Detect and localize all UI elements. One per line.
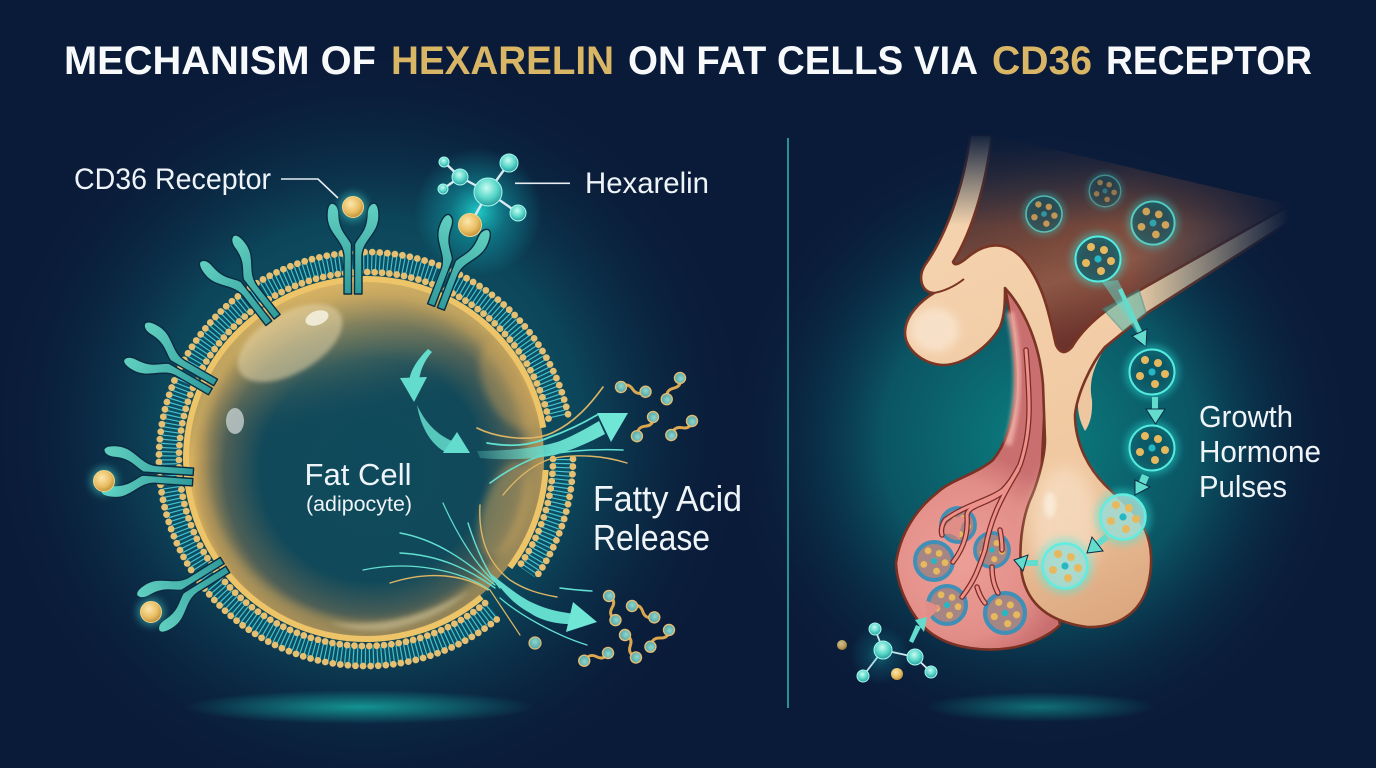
title — [64, 39, 1312, 83]
receptor: top with ligand — [327, 193, 379, 294]
lower molecule — [837, 623, 937, 685]
arrow: pulse 4 to anterior lobe — [1014, 555, 1038, 571]
stalk side strip — [1078, 347, 1105, 431]
portal vessels — [941, 350, 1029, 603]
title: MECHANISM OF — [64, 39, 376, 83]
arrow: lower fatty acid release — [490, 573, 597, 632]
label: Growth Hormone Pulses — [1199, 399, 1321, 504]
hexarelin glow — [414, 148, 542, 276]
arrow: molecule to anterior lobe — [909, 617, 927, 643]
title: RECEPTOR — [1106, 39, 1312, 83]
receptor: left with ligand — [90, 445, 195, 503]
title: HEXARELIN — [391, 39, 614, 83]
receptor: upper left — [196, 232, 293, 336]
panel: pituitary anatomy — [837, 135, 1300, 685]
anterior lobe — [896, 288, 1060, 650]
arrow: pulse 3 to 4 — [1087, 534, 1109, 553]
label: CD36 Receptor: CD36 Receptor — [74, 163, 271, 196]
receptor: left upper — [121, 319, 226, 410]
receptor: hexarelin bound — [412, 213, 493, 316]
title: CD36 — [992, 39, 1092, 83]
gold cell wall — [186, 279, 546, 639]
arrow: vesicle exits hypothalamus — [1102, 280, 1147, 347]
cell body — [188, 281, 553, 637]
title: ON FAT CELLS VIA — [628, 39, 978, 83]
label: Growth Hormone Pulses: Hormone — [1199, 434, 1321, 469]
label: Fat Cell: (adipocyte) — [306, 493, 412, 516]
anterior stalk highlight — [1008, 312, 1017, 445]
fatty acids: lower group — [529, 589, 677, 668]
streaks: lower release — [363, 503, 592, 645]
label: Growth Hormone Pulses: Growth — [1199, 399, 1293, 434]
receptor: lower left with ligand — [134, 543, 239, 635]
membrane bilayer — [159, 252, 573, 666]
label: Growth Hormone Pulses: Pulses — [1199, 469, 1287, 504]
bulb highlight — [911, 308, 959, 352]
portal band — [1103, 290, 1146, 331]
arrow: pulse 2 to 3 — [1135, 474, 1150, 495]
floor glow right — [925, 692, 1155, 722]
label: Fatty Acid Release: Release — [593, 517, 710, 558]
vesicles in anterior lobe — [915, 508, 1025, 633]
label: Fatty Acid Release: Fatty Acid — [593, 478, 742, 519]
hypothalamus tissue — [953, 135, 1290, 352]
vesicle pulses — [1041, 349, 1175, 590]
posterior lobe highlight — [1031, 467, 1099, 583]
label: Fat Cell: Fat Cell — [304, 457, 412, 492]
arrow: signal to release — [417, 405, 470, 453]
bulb crease — [934, 279, 964, 293]
tan tissue: bulb, stalk, posterior lobe, band — [905, 135, 1300, 627]
arrow: pulse 1 to 2 — [1146, 397, 1165, 424]
floor glow left — [185, 690, 535, 724]
panel: fat cell — [90, 148, 700, 668]
arrow: upper fatty acid release — [477, 413, 628, 459]
arrow: signal downward — [400, 349, 432, 402]
label: Hexarelin: Hexarelin — [585, 167, 709, 200]
streaks: upper release — [477, 387, 627, 495]
hypothalamus and stalk — [896, 135, 1300, 650]
vesicles in hypothalamus — [1026, 175, 1175, 282]
panel divider — [787, 138, 789, 708]
fatty acids: upper group — [615, 370, 700, 444]
hexarelin molecule — [438, 154, 526, 236]
label: Fatty Acid Release — [593, 478, 742, 558]
label: Fat Cell — [304, 457, 412, 516]
